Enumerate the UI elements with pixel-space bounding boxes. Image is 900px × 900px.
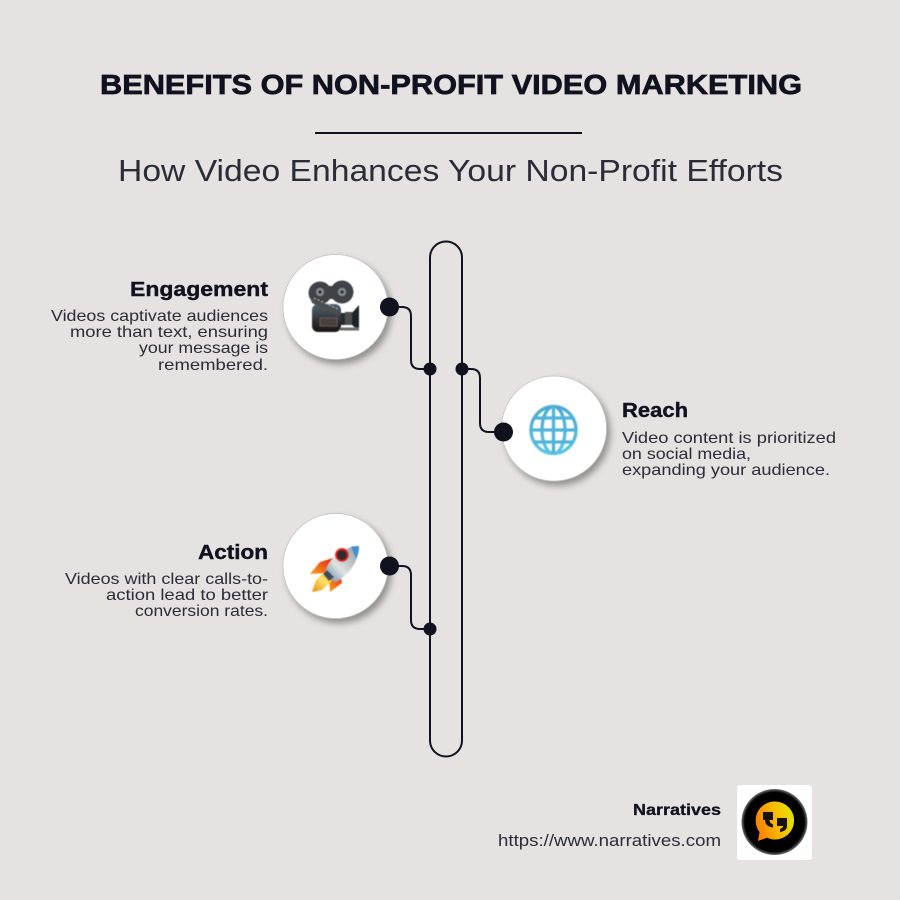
- connector: action: [390, 566, 436, 636]
- central timeline track: [430, 242, 462, 756]
- text: engagement: remembered.: [158, 357, 268, 374]
- text: action: Videos with clear calls-to-: [65, 571, 268, 588]
- text: action: action lead to better: [106, 587, 269, 604]
- icon circle: reach: [502, 376, 606, 481]
- panel: action: [65, 514, 388, 620]
- panel: engagement: [51, 254, 388, 374]
- heading: action: Action: [198, 542, 268, 564]
- connector: reach: [456, 362, 504, 432]
- panel: reach: [502, 376, 836, 481]
- text: engagement: your message is: [139, 340, 268, 357]
- text: action: [65, 571, 269, 620]
- text: reach: expanding your audience.: [622, 462, 830, 479]
- text: engagement: more than text, ensuring: [70, 324, 268, 341]
- text: reach: [622, 430, 836, 479]
- footer: url: https://www.narratives.com: [498, 831, 721, 850]
- logo: [737, 785, 812, 860]
- connector: engagement: [390, 307, 436, 376]
- icon: movie camera: [308, 280, 359, 332]
- subtitle: How Video Enhances Your Non-Profit Efforts: [118, 153, 783, 188]
- text: reach: on social media,: [622, 446, 751, 463]
- text: engagement: Videos captivate audiences: [51, 308, 268, 325]
- icon circle: action: [283, 514, 388, 618]
- icon circle: engagement: [283, 254, 388, 360]
- text: action: conversion rates.: [135, 603, 268, 620]
- title: BENEFITS OF NON-PROFIT VIDEO MARKETING: [100, 69, 802, 100]
- endpoint: action: [380, 556, 399, 576]
- endpoint: engagement: [380, 298, 399, 316]
- icon: rocket: [310, 546, 359, 592]
- heading: reach: Reach: [622, 400, 688, 422]
- icon: globe: [531, 406, 576, 454]
- endpoint: reach: [494, 422, 513, 442]
- text: reach: Video content is prioritized: [622, 430, 836, 447]
- text: engagement: [51, 308, 268, 374]
- footer: brand name: Narratives: [633, 802, 721, 819]
- heading: engagement: Engagement: [130, 279, 268, 301]
